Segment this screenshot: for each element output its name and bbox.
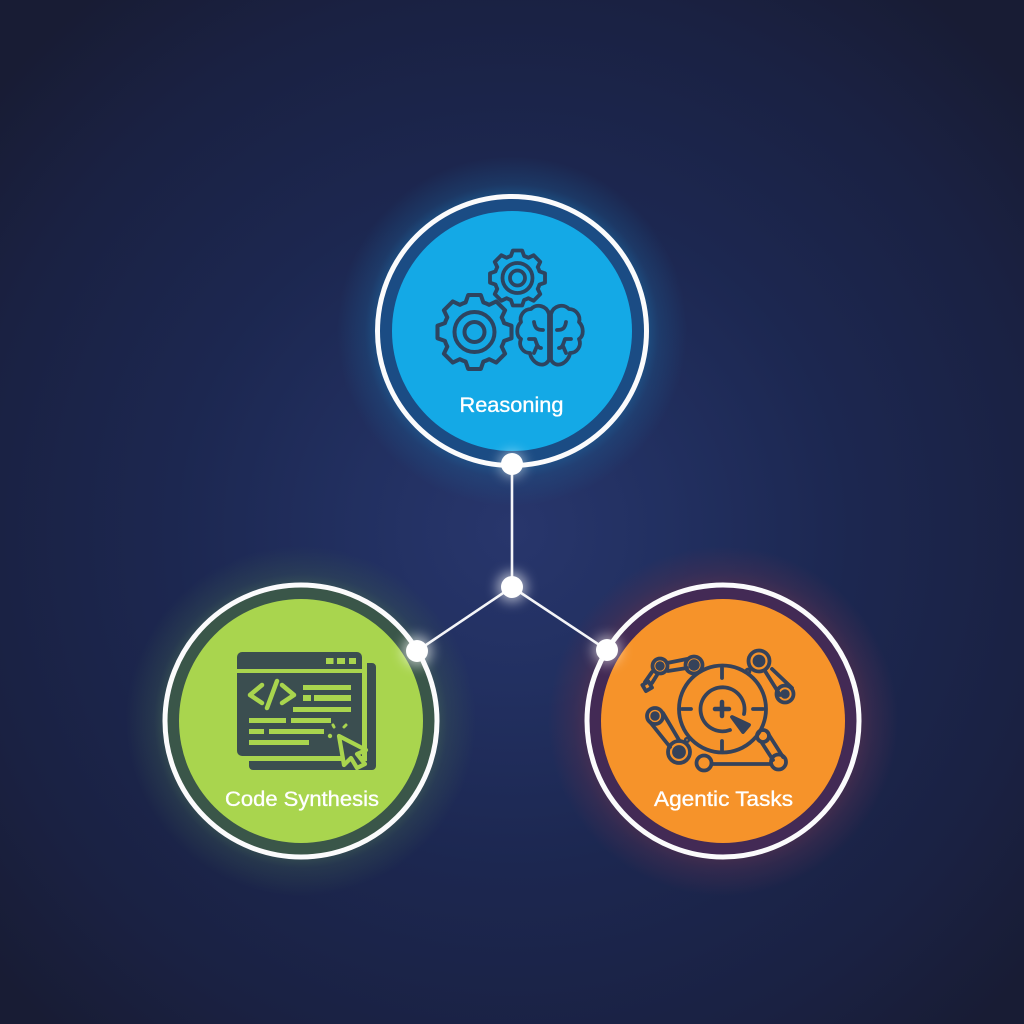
panel: agentic tasks (587, 585, 859, 857)
connector node: left (402, 636, 432, 666)
icon: code window with cursor (237, 652, 376, 770)
icon: gears and brain (438, 250, 583, 369)
label: agentic tasks: Agentic Tasks (654, 788, 793, 811)
panel: reasoning (378, 196, 646, 466)
label: code synthesis: Code Synthesis (225, 788, 379, 811)
connector node: center hub (497, 572, 527, 602)
connector lines (417, 464, 607, 651)
panel: code synthesis (165, 585, 437, 857)
connector node: top (499, 451, 525, 477)
label: reasoning: Reasoning (460, 394, 564, 417)
connector node: right (593, 636, 621, 664)
icon: target and robotic arms (642, 650, 794, 770)
